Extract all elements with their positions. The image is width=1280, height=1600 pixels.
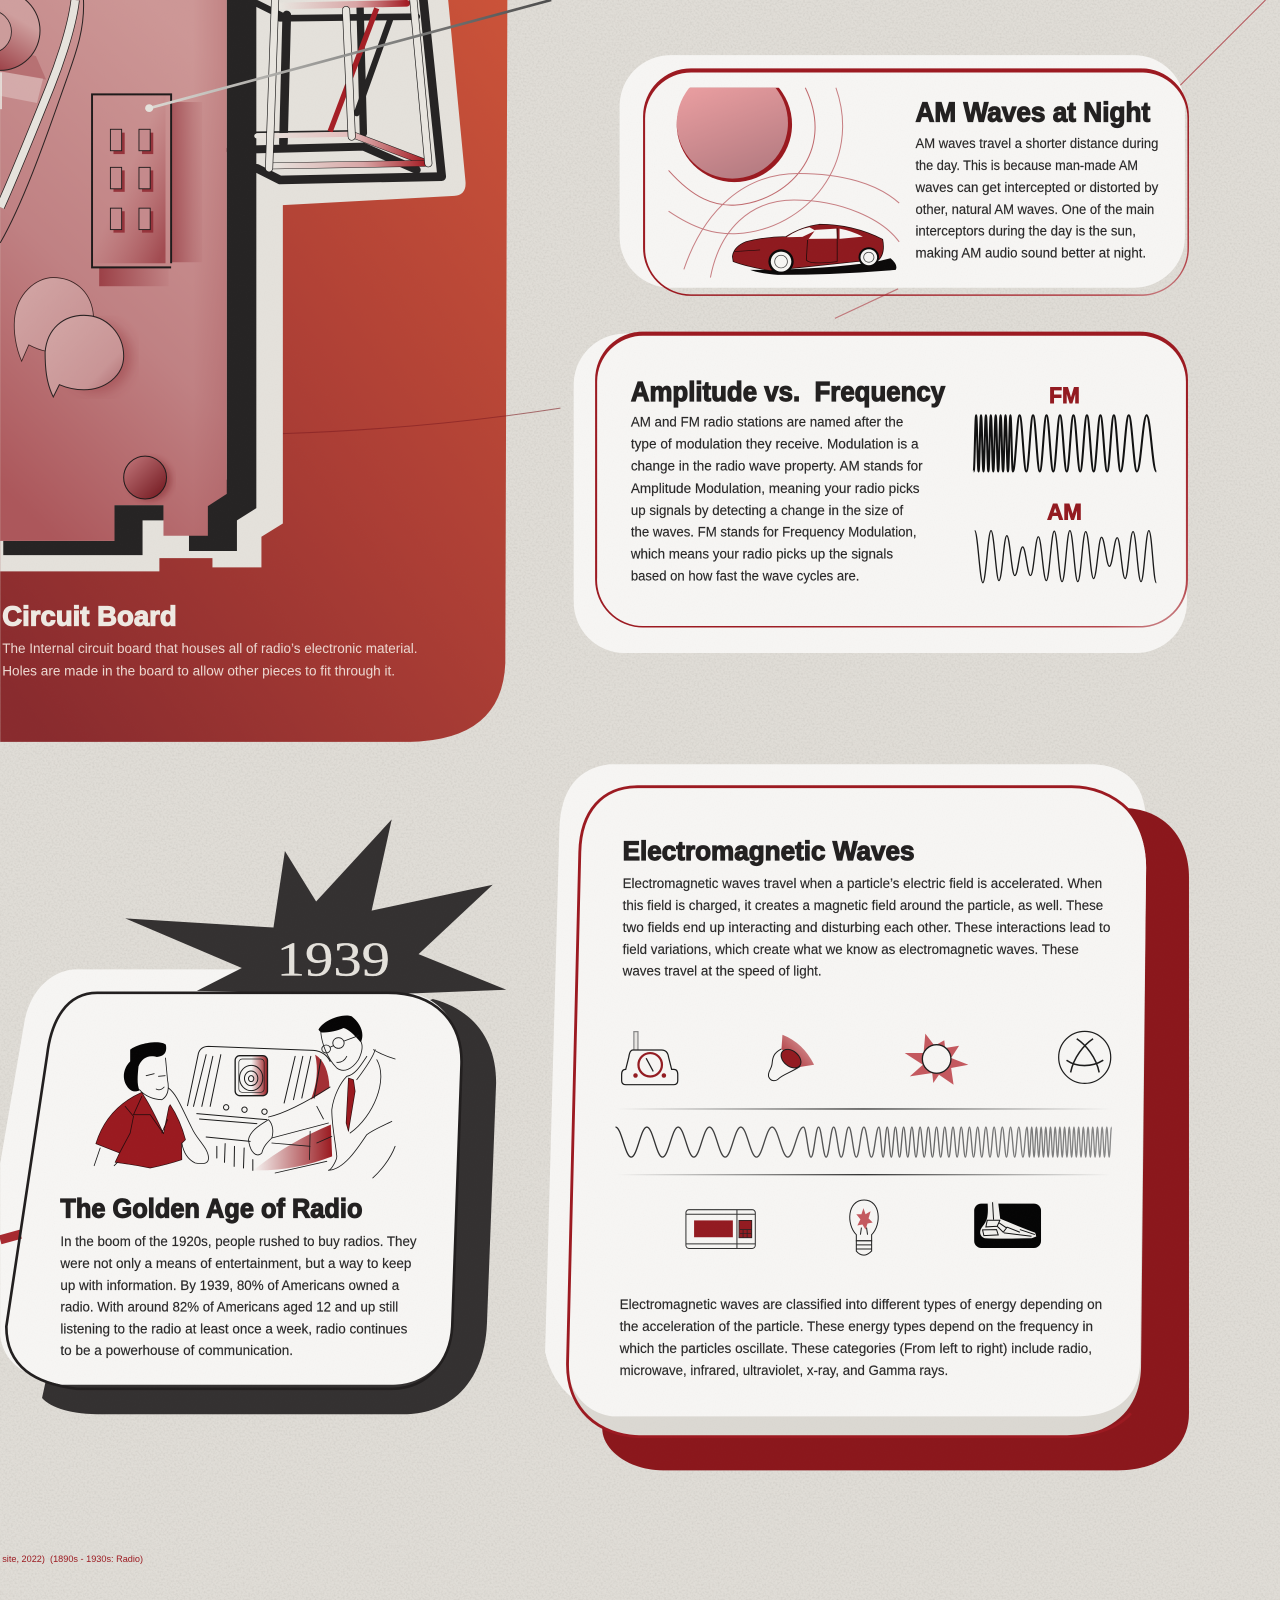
- AM body text: waves can get intercepted or distorted by: [915, 180, 1159, 195]
- golden age text: were not only a means of entertainment, but a way to keep: [59, 1256, 411, 1271]
- top left dials: [0, 0, 46, 109]
- connector line: under AM card: [835, 289, 898, 318]
- EM intro text: two fields end up interacting and disturbing each other. These interactions lead to: [623, 920, 1110, 935]
- golden age text: to be a powerhouse of communication.: [60, 1343, 293, 1358]
- small capacitor: [124, 456, 172, 501]
- amplitude body text: Amplitude Modulation, meaning your radio picks: [631, 481, 920, 496]
- icon: radio: [622, 1032, 678, 1085]
- EM intro text: field variations, which create what we know as electromagnetic waves. These: [623, 942, 1079, 957]
- EM classification text: microwave, infrared, ultraviolet, x-ray, and Gamma rays.: [620, 1363, 948, 1378]
- board shadow: [3, 0, 256, 555]
- curved trace: [0, 0, 84, 243]
- starburst: [125, 819, 506, 994]
- circuit board heading: Circuit Board: [2, 601, 177, 632]
- panel: AM waves at night: [620, 55, 1189, 296]
- source citation: site, 2022) (1890s - 1930s: Radio): [2, 1554, 143, 1564]
- EM intro text: waves travel at the speed of light.: [622, 964, 822, 979]
- radio set: [187, 1046, 330, 1170]
- golden age text: [59, 1234, 417, 1358]
- separator: bottom: [617, 1174, 1110, 1175]
- card base: [568, 787, 1146, 1437]
- radio red accents: [253, 1055, 332, 1170]
- amplitude heading: Amplitude vs. Frequency: [631, 376, 946, 407]
- EM intro text: Electromagnetic waves travel when a particle’s electric field is accelerated. When: [623, 876, 1102, 891]
- red offset shadow: [602, 808, 1189, 1470]
- icon: visible light bulb: [850, 1200, 878, 1255]
- golden age text: listening to the radio at least once a week, radio continues: [60, 1322, 408, 1337]
- EM classification text: Electromagnetic waves are classified into different types of energy depending on: [620, 1297, 1102, 1312]
- EM classification text: which the particles oscillate. These categories (From left to right) include radio,: [619, 1341, 1092, 1356]
- AM body text: making AM audio sound better at night.: [916, 246, 1146, 261]
- golden age text: up with information. By 1939, 80% of Americans owned a: [60, 1278, 400, 1293]
- AM label: AM: [1047, 499, 1082, 524]
- circuit board shape: [0, 0, 227, 541]
- year label: 1939: [277, 932, 390, 987]
- AM body text: AM waves travel a shorter distance during: [916, 136, 1158, 151]
- EM classification text: [619, 1297, 1102, 1378]
- AM body text: [915, 136, 1159, 261]
- icon: microwave: [686, 1210, 755, 1248]
- AM heading: AM Waves at Night: [916, 96, 1150, 127]
- EM classification text: the acceleration of the particle. These energy types depend on the frequency in: [620, 1319, 1093, 1334]
- card surface: [568, 787, 1146, 1416]
- FM label: FM: [1049, 383, 1080, 408]
- card border: [6, 993, 462, 1389]
- EM intro text: [622, 876, 1110, 979]
- icon: gamma radiation: [1059, 1031, 1111, 1083]
- amplitude body text: which means your radio picks up the signals: [630, 547, 893, 562]
- AM body text: the day. This is because man-made AM: [916, 158, 1138, 173]
- card border: [595, 332, 1188, 628]
- EM heading: Electromagnetic Waves: [623, 836, 914, 866]
- golden age heading: The Golden Age of Radio: [60, 1193, 362, 1223]
- board cutout: [0, 0, 466, 571]
- amplitude body text: the waves. FM stands for Frequency Modulation,: [631, 525, 917, 540]
- card surface: [0, 969, 461, 1385]
- card surface: [574, 334, 1187, 653]
- man: [248, 1015, 395, 1178]
- outer paper surface: [545, 764, 1146, 1416]
- amplitude body text: based on how fast the wave cycles are.: [631, 569, 859, 584]
- radio wave arcs: [669, 88, 899, 278]
- car illustration: [732, 224, 896, 275]
- circuit board text: Holes are made in the board to allow other pieces to fit through it.: [2, 664, 395, 679]
- chip socket: [92, 94, 202, 286]
- golden age text: radio. With around 82% of Americans aged 12 and up still: [60, 1300, 398, 1315]
- amplitude body text: up signals by detecting a change in the size of: [631, 503, 904, 518]
- panel: golden age of radio: [0, 819, 506, 1414]
- panel: electromagnetic waves: [545, 764, 1189, 1470]
- illustration: couple with radio: [94, 1015, 395, 1178]
- icon: infrared lamp: [768, 1035, 814, 1081]
- circuit board text: [2, 641, 418, 679]
- AM body text: interceptors during the day is the sun,: [916, 224, 1136, 239]
- amplitude body text: type of modulation they receive. Modulation is a: [631, 436, 919, 451]
- amplitude body text: change in the radio wave property. AM stands for: [631, 458, 923, 473]
- connector line: top right: [1179, 0, 1266, 87]
- card border: [568, 787, 1131, 1437]
- sun: [676, 88, 792, 182]
- AM body text: other, natural AM waves. One of the main: [916, 202, 1154, 217]
- card border: [643, 68, 1189, 296]
- woman: [94, 1042, 208, 1168]
- dark offset shadow: [42, 999, 496, 1414]
- EM intro text: this field is charged, it creates a magnetic field around the particle, as well. These: [623, 898, 1103, 913]
- circuit board text: The Internal circuit board that houses all of radio’s electronic material.: [2, 641, 418, 656]
- FM wave: [974, 415, 1156, 471]
- connector line: panel to amplitude card: [283, 408, 560, 434]
- panel: circuit board: [0, 0, 560, 742]
- bubble capacitors: [14, 278, 132, 397]
- AM wave: [975, 531, 1156, 583]
- red panel background: [0, 0, 507, 742]
- golden age text: In the boom of the 1920s, people rushed to buy radios. They: [60, 1234, 417, 1249]
- electromagnetic spectrum wave: [616, 1127, 1112, 1157]
- icon: x-ray foot: [974, 1200, 1041, 1248]
- pointer line with dot: [145, 0, 551, 112]
- amplitude body text: AM and FM radio stations are named after the: [631, 415, 903, 430]
- amplitude body text: [630, 415, 923, 584]
- icon: ultraviolet sun: [905, 1034, 968, 1085]
- tower frame: [230, 0, 442, 180]
- card surface: [620, 55, 1185, 288]
- separator: top: [617, 1108, 1110, 1110]
- connector stub: [0, 1234, 21, 1240]
- panel: amplitude vs frequency: [574, 332, 1188, 653]
